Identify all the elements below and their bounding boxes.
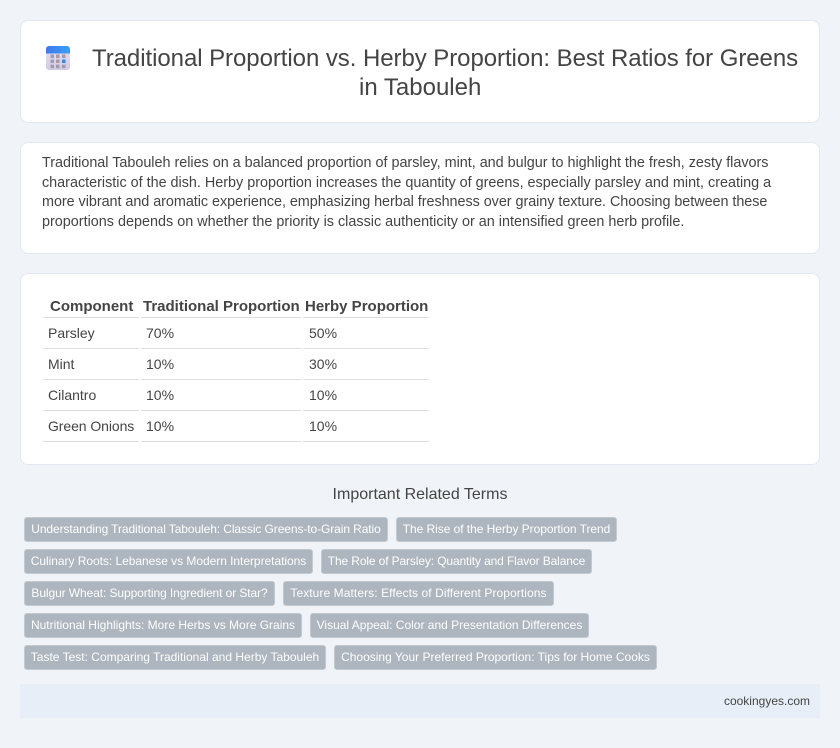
tag: Visual Appeal: Color and Presentation Differences bbox=[317, 618, 582, 632]
tag bbox=[24, 581, 275, 606]
panel: title header bbox=[20, 20, 820, 123]
row: Mint: 30% bbox=[309, 356, 337, 372]
tag: Choosing Your Preferred Proportion: Tips for Home Cooks bbox=[341, 650, 650, 664]
tag bbox=[396, 517, 617, 542]
footer bbox=[20, 684, 820, 718]
panel: comparison table bbox=[20, 273, 820, 465]
row: Cilantro: 10% bbox=[309, 387, 337, 403]
table bbox=[43, 298, 429, 442]
tag: Texture Matters: Effects of Different Proportions bbox=[290, 586, 547, 600]
title: Traditional Proportion vs. Herby Proportion: Best Ratios for Greens bbox=[92, 45, 798, 72]
row: Cilantro bbox=[48, 387, 337, 403]
tag list bbox=[24, 517, 657, 670]
tag: Bulgur Wheat: Supporting Ingredient or Star? bbox=[31, 586, 268, 600]
row: Green Onions: 10% bbox=[309, 418, 337, 434]
text block: introduction: more vibrant and aromatic experience, emphasizing herbal freshness over grainy texture. Choosing between these bbox=[42, 194, 767, 210]
text block: introduction: characteristic of the dish. Herby proportion increases the quantity of greens, especially parsley and mint, creating a bbox=[42, 175, 771, 191]
tag bbox=[24, 645, 326, 670]
tag bbox=[24, 549, 313, 574]
panel: introduction bbox=[20, 142, 820, 254]
row: Mint: Mint bbox=[48, 356, 74, 372]
row: Green Onions bbox=[48, 418, 337, 434]
tag bbox=[321, 549, 592, 574]
tag bbox=[24, 613, 302, 638]
table header: Herby Proportion bbox=[305, 298, 428, 315]
heading: related terms: Important Related Terms bbox=[333, 486, 507, 503]
tag bbox=[334, 645, 657, 670]
title: in Tabouleh bbox=[359, 74, 481, 101]
row: Parsley: Parsley bbox=[48, 325, 95, 341]
text block: introduction bbox=[42, 155, 772, 230]
icon: calendar bbox=[46, 46, 70, 70]
row: Green Onions: Green Onions bbox=[48, 418, 134, 434]
table header: Traditional Proportion bbox=[143, 298, 300, 315]
tag bbox=[310, 613, 589, 638]
text block: introduction: Traditional Tabouleh relies on a balanced proportion of parsley, mint, and bulgur to highlight the fresh, zesty flavors bbox=[42, 155, 768, 171]
table header: Component bbox=[50, 298, 133, 315]
title bbox=[92, 45, 798, 101]
text block: introduction: proportions depends on whether the priority is classic authenticity or an intensified green herb profile. bbox=[42, 214, 684, 230]
row: Mint: 10% bbox=[146, 356, 174, 372]
tag bbox=[24, 517, 388, 542]
tag: The Role of Parsley: Quantity and Flavor Balance bbox=[328, 554, 585, 568]
tag: The Rise of the Herby Proportion Trend bbox=[403, 522, 610, 536]
row: Parsley: 70% bbox=[146, 325, 174, 341]
table header bbox=[50, 298, 428, 315]
footer text: cookingyes.com bbox=[724, 694, 810, 708]
row: Green Onions: 10% bbox=[146, 418, 174, 434]
tag bbox=[283, 581, 554, 606]
tag: Understanding Traditional Tabouleh: Classic Greens-to-Grain Ratio bbox=[31, 522, 381, 536]
tag: Nutritional Highlights: More Herbs vs More Grains bbox=[31, 618, 295, 632]
row: Parsley bbox=[48, 325, 337, 341]
row: Cilantro: 10% bbox=[146, 387, 174, 403]
row: Parsley: 50% bbox=[309, 325, 337, 341]
tag: Taste Test: Comparing Traditional and Herby Tabouleh bbox=[31, 650, 319, 664]
row: Mint bbox=[48, 356, 337, 372]
row: Cilantro: Cilantro bbox=[48, 387, 96, 403]
tag: Culinary Roots: Lebanese vs Modern Interpretations bbox=[31, 554, 306, 568]
